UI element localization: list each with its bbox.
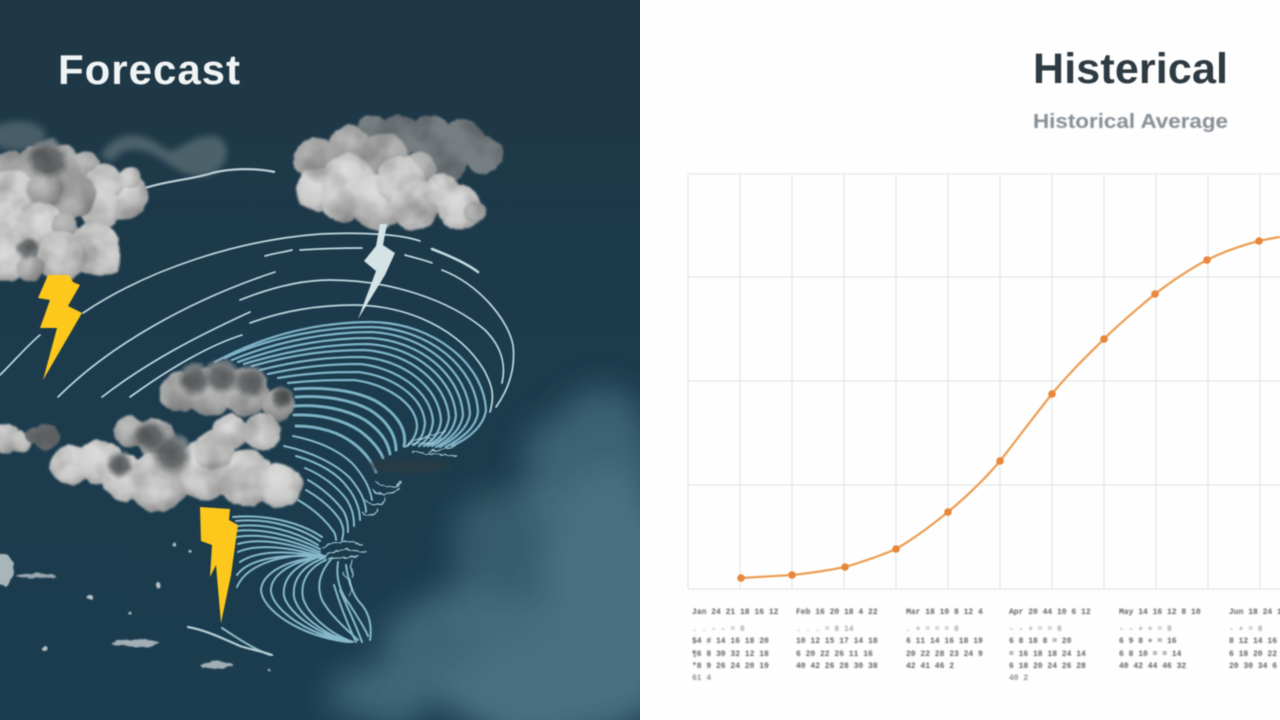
rear cloud haze — [356, 115, 503, 181]
lightning bolt: white — [358, 224, 395, 319]
orange trend line — [741, 237, 1280, 578]
column 5: 6 8 10 = = 14 — [1119, 650, 1182, 659]
column 4: 6 8 18 8 = 20 — [1009, 637, 1072, 646]
column 1 — [692, 608, 779, 683]
column 3 — [906, 608, 983, 671]
heading: historical: Histerical — [1033, 45, 1228, 93]
column 4 — [1009, 608, 1091, 683]
column 5: 40 42 44 46 32 — [1119, 662, 1186, 671]
column 6: - + = 8 — [1229, 625, 1263, 634]
column 1: $4 # 14 16 18 20 — [692, 637, 769, 646]
column 2: . . . = 8 14 — [796, 625, 854, 634]
column 2: 6 20 22 26 11 16 — [796, 650, 873, 659]
panel background — [0, 0, 640, 720]
wind streak from cloud — [145, 169, 275, 188]
lower funnel arcs — [188, 436, 372, 655]
column 2 — [796, 608, 878, 671]
panel background — [640, 0, 1280, 720]
front cloud body — [294, 126, 486, 230]
column 3: . + = = = 8 — [906, 625, 959, 634]
data table under chart — [692, 608, 1280, 683]
column 3: 42 41 46 2 — [906, 662, 954, 671]
chart grid — [688, 174, 1280, 589]
column 3: 20 22 28 23 24 9 — [906, 650, 983, 659]
column 1: 61 4 — [692, 674, 711, 683]
column 4: = 16 18 18 24 14 — [1009, 650, 1086, 659]
column 1: Jan 24 21 18 16 12 — [692, 608, 779, 617]
inner blue arcs — [215, 322, 486, 447]
cloud: upper left — [0, 138, 148, 282]
storm smoke haze — [325, 400, 680, 720]
column 1: ¶6 8 30 32 12 18 — [692, 650, 769, 659]
column 4: 40 2 — [1009, 674, 1028, 683]
data points — [737, 237, 1263, 582]
column 2: Feb 16 20 18 4 22 — [796, 608, 878, 617]
column 5: May 14 16 12 8 10 — [1119, 608, 1201, 617]
tornado wind lines — [0, 233, 514, 655]
column 6: 6 18 20 22 — [1229, 650, 1277, 659]
dark smudge in funnel — [366, 460, 450, 472]
column 5: - - + + = 8 — [1119, 625, 1172, 634]
column 3: 6 11 14 16 18 19 — [906, 637, 983, 646]
column 1: . . - - = 6 — [692, 625, 745, 634]
column 4: Apr 20 44 10 6 12 — [1009, 608, 1091, 617]
lightning bolt: yellow left — [38, 275, 82, 380]
column 6: 8 12 14 16 — [1229, 637, 1277, 646]
wisps of cloud — [0, 121, 227, 176]
line chart — [688, 174, 1280, 589]
cloud: central dark — [160, 358, 294, 421]
column 4: 6 18 20 24 26 28 — [1009, 662, 1086, 671]
cloud: lower — [50, 413, 302, 512]
column 5: 6 9 8 + = 16 — [1119, 637, 1177, 646]
column 2: 10 12 15 17 14 18 — [796, 637, 878, 646]
cloud: left edge small — [0, 423, 59, 453]
knotted turbulence lines — [322, 430, 456, 595]
column 4: - - + = = 8 — [1009, 625, 1062, 634]
panel: forecast — [0, 0, 680, 720]
column 5 — [1119, 608, 1201, 671]
lightning bolt: yellow lower — [200, 507, 238, 623]
panel: historical — [687, 51, 1280, 681]
column 6: 20 30 34 6 — [1229, 662, 1277, 671]
column 1: *8 9 26 24 20 19 — [692, 662, 769, 671]
heading: forecast: Forecast — [58, 46, 240, 93]
cloud: upper right — [294, 115, 503, 230]
column 6 — [1229, 608, 1280, 671]
thick inner arcs — [294, 388, 405, 472]
small debris clouds and specks — [0, 543, 272, 672]
column 3: Mar 18 10 8 12 4 — [906, 608, 983, 617]
outer pale arcs — [0, 233, 514, 412]
column 2: 40 42 26 28 30 38 — [796, 662, 878, 671]
subtitle: historical average: Historical Average — [1033, 111, 1228, 133]
